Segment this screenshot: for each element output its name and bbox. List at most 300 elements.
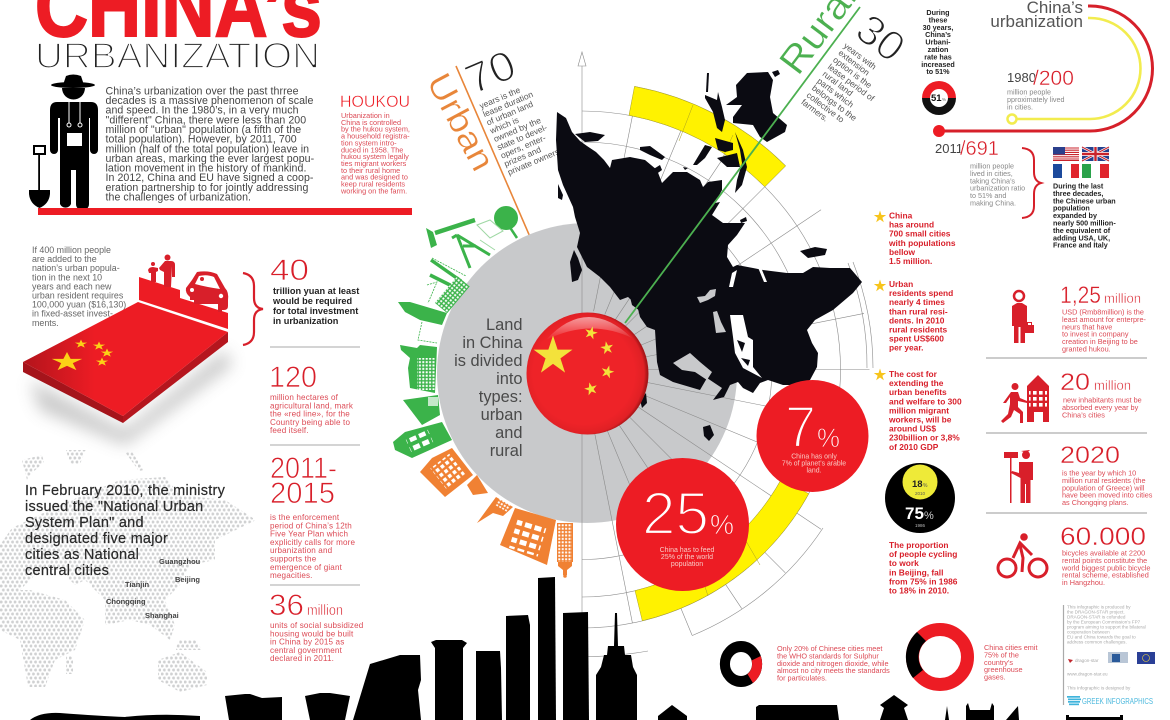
land in china text: into [496,370,522,388]
skyline silhouette [30,577,1123,720]
urban lease text: prizes and [502,144,543,169]
text block: during these 30 years: China’s [925,30,951,39]
black world map [556,70,862,441]
bracket [243,273,263,345]
stat: 1980 200 million: /200 [1033,67,1074,90]
urban lease text: opers, enter- [499,132,547,161]
text block: introduction: "different" China, there were less than 200 [106,114,306,126]
rural lease text: extension [837,48,872,78]
stat: 2011-2015: supports the [270,554,317,564]
panel: houkou: ties migrant workers [341,159,407,168]
text block: cycling in beijing: to work [889,558,919,568]
text block: cycling in beijing: in Beijing, fall [889,567,943,577]
panel: houkou: HOUKOU [340,92,410,111]
stat: 60.000: in Hangzhou. [1062,578,1105,587]
stat: 2011 691 million [935,138,1025,208]
text block: during these 30 years: to 51% [926,67,950,76]
stat: 120 million hectares: agricultural land, mark [270,401,354,410]
stat: 1,25 million: million [1104,290,1141,306]
rural lease text [799,5,914,139]
rural lease text: option is the [831,55,874,90]
stat: 36 million: in China by 2015 as [270,638,344,647]
stat: 120 million hectares [269,361,354,435]
icon: orange wedge tower [477,497,513,523]
credits panel: address common challenges. [1067,640,1127,644]
stat: 1,25 million: neurs that have [1062,322,1112,331]
text block: during the last three decades: expanded by [1053,211,1097,220]
text block: during the last three decades: population [1053,204,1090,213]
stat: 1,25 million: 1,25 [1060,282,1101,309]
stat: 1,25 million: to invest in company [1062,330,1129,339]
text block: 400 million people [32,245,126,328]
land in china text: and [495,424,522,442]
text block: cycling in beijing: from 75% in 1986 [889,576,958,586]
rural lease text: years with [842,41,879,72]
stat: 2011-2015: is the enforcement [270,513,340,522]
land in china text [454,316,523,460]
icon: cyclist [998,533,1047,577]
text block: 400 million people: are added to the [32,254,97,264]
icon: orange small house [467,475,488,495]
donut: 75 percent greenhouse gases [906,630,968,684]
stat: 2020: million rural residents (the [1062,476,1146,485]
fact: cost of urban benefits: million migrant [889,405,949,415]
fact: 700 small cities: bellow [889,247,916,257]
panel: houkou [340,92,410,195]
stat: 20 million: China’s cities [1062,410,1105,419]
fact: 700 small cities: has around [889,220,934,230]
land in china text: urban [481,406,522,424]
map labels: five cities: Guangzhou [159,557,201,566]
bracket [1022,148,1041,218]
fact: urban residents spend: than rural resi- [889,306,948,316]
text block: during these 30 years: increased [921,60,955,69]
stat: 120 million hectares: feed itself. [270,426,309,435]
fact: cost of urban benefits: around US$ [889,424,936,434]
text block: who standards [777,644,890,683]
text block: national urban system plan: designated five major [25,531,168,547]
land in china text: in China [462,334,523,352]
stat: 1980 200 million: in cities. [1007,102,1033,112]
china flag ball [526,312,648,434]
polar grid [578,52,873,657]
stat: 1,25 million: USD (Rmb8million) is the [1062,308,1144,316]
stat: 2011 691 million: urbanization ratio [970,184,1025,193]
icon: tall tower [398,302,447,325]
fact: urban residents spend [874,279,953,353]
red circle: 7 percent: 7% of planet’s arable [782,460,846,468]
heading: china's urbanization timeline [990,0,1083,31]
illustration: flag platform with family and car [23,254,232,445]
credits panel: This Infographic is designed by [1067,686,1131,690]
stat: 2011-2015: 2015 [270,477,335,510]
red circle: 7 percent: China has only [791,454,837,460]
stat: 40 trillion yuan: in urbanization [273,316,339,326]
text block: national urban system plan: In February 2010, the ministry [25,483,226,499]
red circle: 7 percent: % [817,423,840,453]
title [35,0,322,76]
text block: 400 million people: nation’s urban popula- [32,263,120,273]
red circle: 7 percent: land. [807,468,822,474]
chart: cycling proportion circles: 2010 [915,491,926,496]
rural lease text: lease period of [826,62,877,104]
fact: urban residents spend: spent US$600 [889,334,944,344]
credits panel: EU and China towards the goal to [1067,634,1136,640]
icon: orange water tower [557,523,573,578]
text block: national urban system plan [25,483,226,579]
text block: national urban system plan: System Plan" and [25,515,144,531]
stat: 20 million: million [1094,377,1131,393]
text block: during the last three decades: France and Italy [1053,241,1108,250]
rural lease text: belongs to the [810,83,859,123]
text block: during the last three decades: During the last [1053,182,1104,190]
stat: 36 million: declared in 2011. [270,654,334,663]
stat: 40 trillion yuan [270,254,359,326]
stat: 2020: population of Greece) will [1062,483,1145,492]
stat: 2011 691 million: lived in cities, [970,169,1013,178]
dotted world map [0,450,256,692]
text block: during these 30 years: zation [928,45,948,54]
chart: cycling proportion circles: 75 [905,504,924,523]
rural lease text: 30 [848,5,914,71]
donut: 51 percent: 51 [931,93,942,104]
text block: cycling in beijing [889,540,958,596]
panel: houkou: keep rural residents [341,180,405,188]
text block: 400 million people: tion in the next 10 [32,272,102,282]
text block: who standards: Only 20% of Chinese cities meet [777,644,882,653]
stat: 2011-2015: 2011- [270,452,337,485]
fact: cost of urban benefits: and welfare to 300 [889,396,962,406]
rural lease text: rural land [821,69,855,98]
stat: 2011 691 million: making China. [970,198,1016,208]
red circle: 25 percent: 25% of the world [661,554,713,561]
stat: 2011-2015: urbanization and [270,546,332,555]
icon: flags of USA UK France Italy [1053,147,1109,178]
credits panel: dragon-star [1075,658,1099,663]
stat: 20 million: absorbed every year by [1062,403,1139,412]
panel: houkou: Urbanization in [341,111,390,120]
red circle: 25 percent: China has to feed [660,547,715,554]
rural lease text: parts which [815,76,856,110]
stat: 2011-2015: emergence of giant [270,563,343,572]
text block: 400 million people: If 400 million people [32,245,111,255]
text block: during the last three decades: the equivalent of [1053,226,1111,235]
stat: 120 million hectares: million hectares of [270,393,339,402]
chart: cycling proportion circles [885,463,955,533]
panel: houkou: hukou system legally [341,152,409,161]
stat: 40 trillion yuan: would be required [272,296,352,306]
urban lease text: which is [488,115,520,136]
panel: houkou: to their rural home [341,166,400,175]
urban lease text: owned by the [492,115,543,144]
land in china text: is divided [454,352,522,370]
text block: during the last three decades: the Chinese urban [1053,196,1116,205]
donut: 51 percent [922,81,956,115]
urban lease text: of urban land [485,99,535,127]
text block: during the last three decades: three decades, [1053,189,1103,198]
icon: wedge building [403,395,440,425]
icon: tree [494,206,518,238]
chart: cycling proportion circles: % [923,483,928,489]
stat: 2011 691 million: 2011 [935,141,963,156]
map labels: five cities: Chongqing [106,597,146,606]
text block: greenhouse gases [984,643,1038,682]
fact: cost of urban benefits: urban benefits [889,387,947,397]
stat: 60.000 [1060,523,1150,587]
text block: during the last three decades: nearly 500 million- [1053,218,1116,228]
stat: 36 million: million [307,603,343,619]
orange city icons [420,448,573,578]
icon: orange apartment block [420,448,473,497]
urban lease text [419,40,563,313]
icon: painter [1004,450,1033,503]
stat: 60.000: bicycles available at 2200 [1062,548,1145,558]
stat: 60.000: 60.000 [1060,523,1146,551]
fact: 700 small cities: 1.5 million. [889,256,932,266]
text block: national urban system plan: central cities [25,563,109,579]
chart: cycling proportion circles: % [924,510,934,522]
fact: cost of urban benefits: extending the [889,378,944,388]
stat: 60.000: rental scheme, established [1062,571,1149,580]
text block: greenhouse gases: China cities emit [984,643,1038,652]
fact: urban residents spend: per year. [889,343,923,353]
urban lease text: lease duration [481,89,535,119]
grey land circle [437,223,737,523]
stat: 1,25 million: creation in Beijing to be [1062,337,1138,346]
urban lease text: years is the [478,85,522,111]
red circle: 7 percent [756,380,868,492]
red circle: 25 percent: population [671,561,703,568]
text block: during these 30 years [921,8,955,76]
urban lease text: 70 [458,40,523,103]
fact: urban residents spend: Urban [889,279,913,289]
stat: 20 million [1060,369,1142,419]
icon: factory [400,345,437,393]
stat: 120 million hectares: 120 [269,361,317,394]
text block: 400 million people: in fixed-asset invest- [32,309,113,319]
text block: introduction: million of "urban" population (a fifth of the [106,124,301,136]
fact: cost of urban benefits [874,368,962,452]
icon: farmer with shovel [29,74,98,211]
text block: during these 30 years: Urbani- [925,38,951,47]
text block: cycling in beijing: of people cycling [889,549,957,559]
text block: introduction: China’s urbanization over the past thrree [106,86,299,98]
map labels: five cities: Beijing [175,575,200,584]
fact: urban residents spend: nearly 4 times [889,297,945,307]
panel: houkou: China is controlled [341,118,401,127]
urban lease text: private owners [506,146,561,177]
text block: cycling in beijing: to 18% in 2010. [889,586,949,596]
stat: 36 million [269,589,363,663]
stat: 120 million hectares: the «red line», for the [270,410,350,419]
donut: 51 percent: % [942,97,946,102]
stat: 36 million: central government [270,646,343,655]
stat: 2011-2015 [270,452,356,580]
title: URBANIZATION [35,35,320,76]
text block: introduction: In 2012, China and EU have signed a coop- [106,172,314,184]
stat: 1,25 million: granted hukou. [1062,344,1111,354]
heading: china's urbanization timeline: urbanization [990,12,1083,31]
text block: who standards: for particulates. [777,674,827,683]
flag: France [1053,164,1079,178]
divider bar [38,208,412,215]
text block: during these 30 years: these [929,15,947,24]
icon: walker and building [1001,375,1049,423]
chart: cycling proportion circles: 1986 [915,523,926,528]
stat: 2020: have been moved into cities [1062,491,1153,500]
stat: 36 million: housing would be built [270,629,354,638]
urban lease text: state to devel- [495,122,549,152]
fact: 700 small cities: 700 small cities [889,229,951,239]
credits panel [1064,604,1155,706]
fact: 700 small cities [874,210,956,266]
text block: greenhouse gases: gases. [984,673,1006,682]
panel: houkou: duced in 1958. The [341,145,403,154]
fact: cost of urban benefits: of 2010 GDP [889,442,939,452]
stat: 1,25 million: least amount for enterpre- [1062,315,1147,324]
red circle: 25 percent: % [710,509,734,540]
stat: 2011-2015: period of China’s 12th [270,521,352,530]
stat: 1980 200 million: million people [1007,88,1051,96]
text block: introduction: million (half of the total population) leave in [106,143,309,155]
stat: 40 trillion yuan: trillion yuan at least [273,286,359,296]
stat: 40 trillion yuan: 40 [270,254,309,287]
rural lease text: collective to [805,90,846,125]
text block: 400 million people: ments. [32,318,59,328]
yellow arc bands [629,86,809,621]
stat: 1980 200 million: 1980 [1007,70,1036,85]
text block: who standards: almost no city meets the standards [777,666,890,675]
stat: 2011 691 million: million people [970,162,1014,170]
stat: 60.000: world biggest public bicycle [1061,563,1150,572]
rural axis line and label [625,0,865,323]
credits panel: program aiming to support the bilateral [1067,624,1146,630]
stat: 20 million: 20 [1060,369,1090,396]
text block: national urban system plan: issued the "National Urban [25,499,204,515]
text block: who standards: the WHO standards for Sulphur [777,651,879,660]
stat: 2011 691 million: taking China’s [970,176,1015,185]
map labels: five cities [106,557,201,620]
fact: cost of urban benefits: The cost for [889,369,938,379]
fact: urban residents spend: dents. In 2010 [889,315,945,325]
stat: 2011-2015: explicitly calls for more [270,538,356,547]
fact: urban residents spend: rural residents [889,324,948,334]
land in china text: types: [479,388,522,406]
red circle: 25 percent: 25 [642,480,709,547]
icon: oil pump [426,220,490,268]
stat: 2011 691 million: to 51% and [970,191,1006,200]
stat: 36 million: 36 [269,589,304,622]
stat: 1,25 million [1060,282,1147,354]
text block: introduction: total population). However, by 2011, 700 [106,134,297,146]
stat: 2020: as Chongqing plans. [1062,498,1129,507]
panel: houkou: tion system intro- [341,138,397,147]
stat: 2020 [1060,442,1153,507]
panel: houkou: by the hukou system, [341,125,410,134]
text block: during these 30 years: 30 years, [923,23,953,32]
stat: 1980 200 million [1007,67,1074,112]
text block: introduction [106,86,315,203]
credits panel: cooperation between [1067,630,1110,634]
text block: introduction: urban areas, marking the ever largest popu- [106,153,315,165]
stat: 120 million hectares: Country being able to [270,418,350,427]
text block: who standards: dioxide and nitrogen dioxide, while [777,659,889,668]
timeline curves [933,6,1152,137]
text block: introduction: lation movement in the history of mankind. [106,162,306,174]
stat: 1980 200 million: pproximately lived [1007,95,1065,104]
credits panel: DRAGON-STAR is cofunded [1067,614,1126,620]
text block: introduction: eration partnership to for jointly addressing [106,182,308,194]
icon: industrial tower [427,258,470,313]
red circle: 25 percent [616,458,749,591]
icon: green house [393,422,452,458]
flag: USA [1053,147,1079,161]
rural lease text: farmers. [799,97,830,124]
credits panel: by the European Commission’s FP7 [1067,620,1141,624]
text block: 400 million people: years and each new [32,281,112,291]
text block: 400 million people: 100,000 yuan ($16,130) [32,300,126,310]
fact: urban residents spend: residents spend [889,288,953,298]
text block: greenhouse gases: country’s [984,658,1013,667]
map labels: five cities: Tianjin [125,580,149,589]
stat: 2011 691 million: /691 [960,138,999,160]
text block: greenhouse gases: greenhouse [984,665,1023,674]
panel: houkou: working on the farm. [340,186,407,195]
text block: during these 30 years: During [926,8,950,17]
red circle: 7 percent: 7 [785,395,816,460]
stat: 40 trillion yuan: for total investment [273,306,358,316]
urban lease text: Urban [419,67,502,177]
stat: 20 million: new inhabitants must be [1063,396,1142,404]
land in china text: Land [486,316,522,334]
fact: 700 small cities: China [889,210,913,220]
stat: 2020: is the year by which 10 [1062,468,1136,478]
panel: houkou: and was designed to [341,173,408,182]
text block: greenhouse gases: 75% of the [984,650,1019,659]
icon: orange large block [500,508,556,565]
panel: houkou: a household registra- [341,132,410,141]
donut: 20 percent air standards [725,646,762,683]
credits panel: This infographic is produced by [1067,604,1131,610]
stat: 2020: 2020 [1060,442,1120,469]
map lakes [673,265,767,380]
text block: introduction: decades is a massive phenomenon of scale [106,95,313,107]
icon: businessman [1012,291,1034,343]
stat: 36 million: units of social subsidized [270,621,363,630]
credits panel: www.dragon-star.eu [1067,672,1108,676]
stat: 2011-2015: Five Year Plan which [270,530,348,539]
fact: cost of urban benefits: workers, will be [888,414,952,424]
map labels: five cities: Shanghai [145,611,179,620]
text block: national urban system plan: cities as National [25,547,139,563]
credits panel: the DRAGON-STAR project. [1067,610,1125,614]
flag: UK [1082,147,1109,161]
stat: 2011-2015: megacities. [270,571,313,580]
flag: Italy [1082,164,1109,178]
fact: cost of urban benefits: 230billion or 3,8% [889,433,960,443]
text block: introduction: and speed. In the 1980’s, in a very much [106,105,299,117]
text block: during the last three decades [1053,182,1116,250]
text block: during these 30 years: rate has [924,52,952,61]
text block: cycling in beijing: The proportion [889,540,949,550]
land in china text: rural [490,442,522,460]
green city icons [393,206,518,458]
text block: during the last three decades: adding USA, UK, [1053,233,1110,242]
chart: cycling proportion circles: 18 [912,479,923,490]
text block: 400 million people: urban resident requires [32,290,124,300]
fact: 700 small cities: with populations [888,238,956,248]
stat: 60.000: rental points constitute the [1062,556,1147,565]
